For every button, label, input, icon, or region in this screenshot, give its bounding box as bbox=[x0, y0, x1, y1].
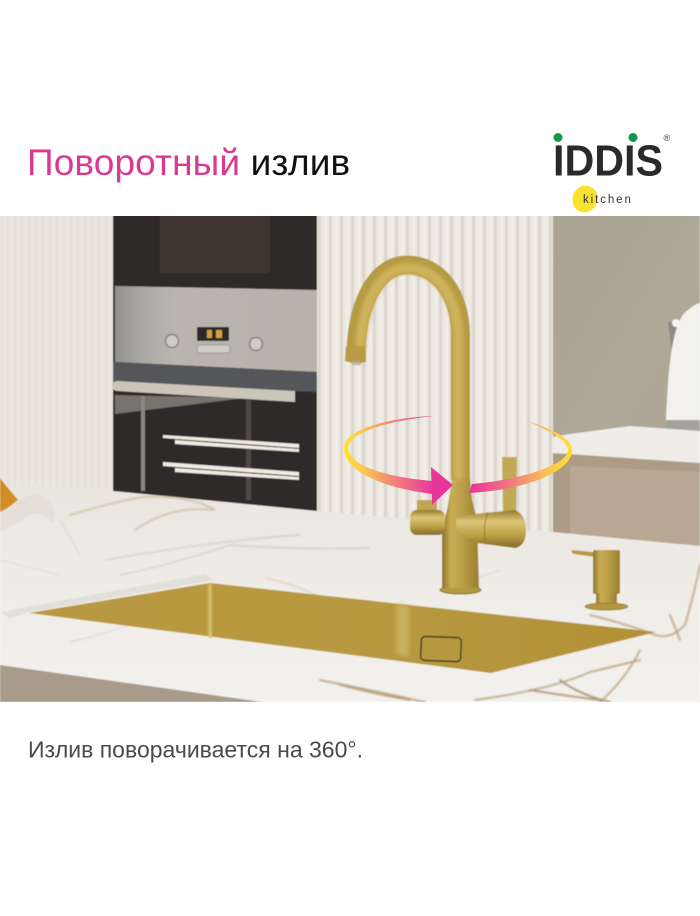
decorative bowl and fruit bbox=[0, 478, 55, 531]
faucet spout bbox=[356, 265, 460, 480]
dispenser body bbox=[593, 550, 620, 594]
sink light streaks bbox=[208, 583, 212, 638]
oven knobs bbox=[166, 334, 178, 348]
faucet bbox=[345, 265, 526, 594]
oven microwave window bbox=[160, 216, 270, 273]
rotation arrow bbox=[344, 416, 572, 505]
faucet base ring bbox=[440, 586, 481, 594]
oven rack reflections bbox=[163, 435, 299, 480]
logo registered mark: ® bbox=[664, 133, 670, 143]
sink back rim bbox=[0, 574, 215, 618]
faucet right cylinder bbox=[456, 510, 526, 548]
logo kitchen text: kitchen bbox=[583, 194, 633, 206]
kettle bbox=[666, 303, 700, 432]
faucet right lever bbox=[502, 457, 517, 511]
kitchen photo bbox=[0, 200, 700, 702]
oven base bbox=[113, 200, 317, 515]
oven dark band bbox=[113, 362, 317, 392]
oven handle bbox=[117, 381, 295, 402]
logo green dots bbox=[554, 133, 638, 142]
right lower cabinet bbox=[553, 453, 700, 546]
left fluted panel bbox=[0, 200, 113, 506]
left arc with arrow bbox=[344, 416, 453, 505]
logo yellow spot bbox=[569, 182, 601, 216]
built-in oven bbox=[112, 200, 317, 515]
logo wordmark: IDDIS bbox=[553, 136, 663, 186]
arrow head bbox=[431, 467, 453, 505]
logo: IDDIS kitchen bbox=[553, 133, 670, 216]
right arc with arrow bbox=[469, 421, 572, 493]
title: Поворотный излив bbox=[27, 142, 350, 183]
marble veins bbox=[0, 497, 700, 702]
sink bbox=[0, 574, 656, 673]
dispenser base bbox=[585, 603, 628, 610]
back wall bbox=[553, 200, 700, 441]
wood plinth bbox=[0, 665, 262, 702]
oven door reflection bbox=[115, 395, 245, 414]
faucet left handle bbox=[410, 500, 445, 535]
sink bowl bbox=[29, 583, 656, 673]
oven control panel bbox=[115, 286, 317, 372]
soap dispenser bbox=[571, 550, 628, 610]
faucet spout tip bbox=[345, 346, 366, 363]
central fluted panel bbox=[317, 200, 553, 546]
caption: Излив поворачивается на 360°. bbox=[28, 736, 363, 762]
marble countertop bbox=[0, 485, 700, 702]
oven display bbox=[197, 327, 229, 341]
faucet body bbox=[442, 477, 479, 588]
dispenser neck bbox=[570, 550, 594, 558]
right counter slab bbox=[552, 426, 700, 463]
sink drain bbox=[421, 636, 461, 662]
